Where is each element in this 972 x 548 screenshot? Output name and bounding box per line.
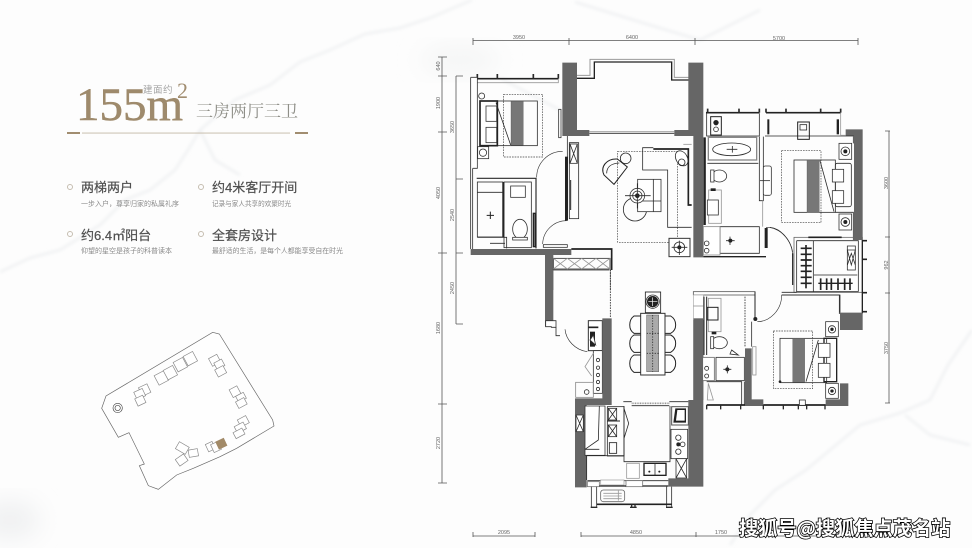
upper-left: balcony and bedroom 1 xyxy=(471,59,690,290)
dimension lines: 3650 xyxy=(450,121,456,133)
dimension lines: 640 xyxy=(436,61,442,71)
dimension lines: 4850 xyxy=(630,530,642,536)
dimension lines: 1900 xyxy=(436,97,442,109)
dimension lines: 2450 xyxy=(450,282,456,294)
corridor cabinet xyxy=(565,136,579,221)
walk-in closet xyxy=(770,227,867,314)
main structural walls xyxy=(688,63,863,257)
feature: balcony xyxy=(68,228,172,255)
feature: two lifts two households: 两梯两户 xyxy=(81,180,133,195)
feature: balcony: 约6.4㎡阳台 xyxy=(81,228,151,243)
kitchen-side walls xyxy=(575,318,703,487)
dimension lines: 962 xyxy=(884,260,890,270)
feature: two lifts two households: 一步入户，尊享归家的私属礼序 xyxy=(81,199,179,208)
feature: all-suite design: 全套房设计 xyxy=(212,228,277,243)
dining area xyxy=(545,270,703,487)
dimension lines: 1680 xyxy=(436,322,442,334)
label: built area: 建面约 xyxy=(143,84,173,96)
superscript 2: 2 xyxy=(177,78,188,103)
watermark: 搜狐号@搜狐焦点茂名站 xyxy=(739,513,950,541)
heading: area and layout xyxy=(67,78,308,134)
dimension lines: 6400 xyxy=(626,35,638,41)
dimension lines: 3750 xyxy=(884,342,890,354)
area figure 155m: 155m xyxy=(76,79,183,131)
dimension lines: 2095 xyxy=(498,530,510,536)
feature: living room width: 记录与家人共享的欢聚时光 xyxy=(212,199,292,208)
kitchen and rear balcony xyxy=(576,402,688,507)
feature: living room width: 约4米客厅开间 xyxy=(212,180,297,195)
feature: two lifts two households xyxy=(68,180,179,208)
dimension lines: 3600 xyxy=(884,177,890,189)
entrance xyxy=(545,249,612,290)
balcony xyxy=(577,59,690,133)
bedroom 1 xyxy=(471,74,563,249)
lower-right walls xyxy=(745,313,863,406)
heading rule xyxy=(67,132,308,134)
feature: all-suite design: 最舒适的生活，是每个人都能享受自在时光 xyxy=(212,246,343,255)
lower-right: bedroom 3 and bathroom xyxy=(693,292,863,409)
bathroom 1 xyxy=(477,178,567,248)
floor plan xyxy=(471,59,867,507)
dining table and chairs xyxy=(630,292,676,375)
living room furniture xyxy=(603,144,692,257)
layout title: 三房两厅三卫 xyxy=(196,102,298,121)
master bathroom xyxy=(703,109,841,257)
feature: all-suite design xyxy=(198,228,343,255)
dimension lines: 2540 xyxy=(450,209,456,221)
dimension lines: 1750 xyxy=(715,530,727,536)
feature: balcony: 仰望的星空是孩子的科普读本 xyxy=(81,246,172,255)
master bedroom xyxy=(765,113,853,257)
shoe cabinet xyxy=(576,321,602,397)
bathroom 3 xyxy=(693,292,757,409)
bedroom 3 xyxy=(753,295,840,409)
dimension lines xyxy=(436,35,890,537)
upper-right: master suite xyxy=(688,63,863,257)
bedroom wall base xyxy=(471,249,571,255)
dimension lines: 4050 xyxy=(436,187,442,199)
dimension lines: 2720 xyxy=(436,437,442,449)
structural wall xyxy=(562,63,690,136)
dimension lines: 5700 xyxy=(773,36,785,42)
dimension lines: 3950 xyxy=(513,35,525,41)
feature: living room width xyxy=(198,180,297,208)
site map xyxy=(102,332,274,489)
